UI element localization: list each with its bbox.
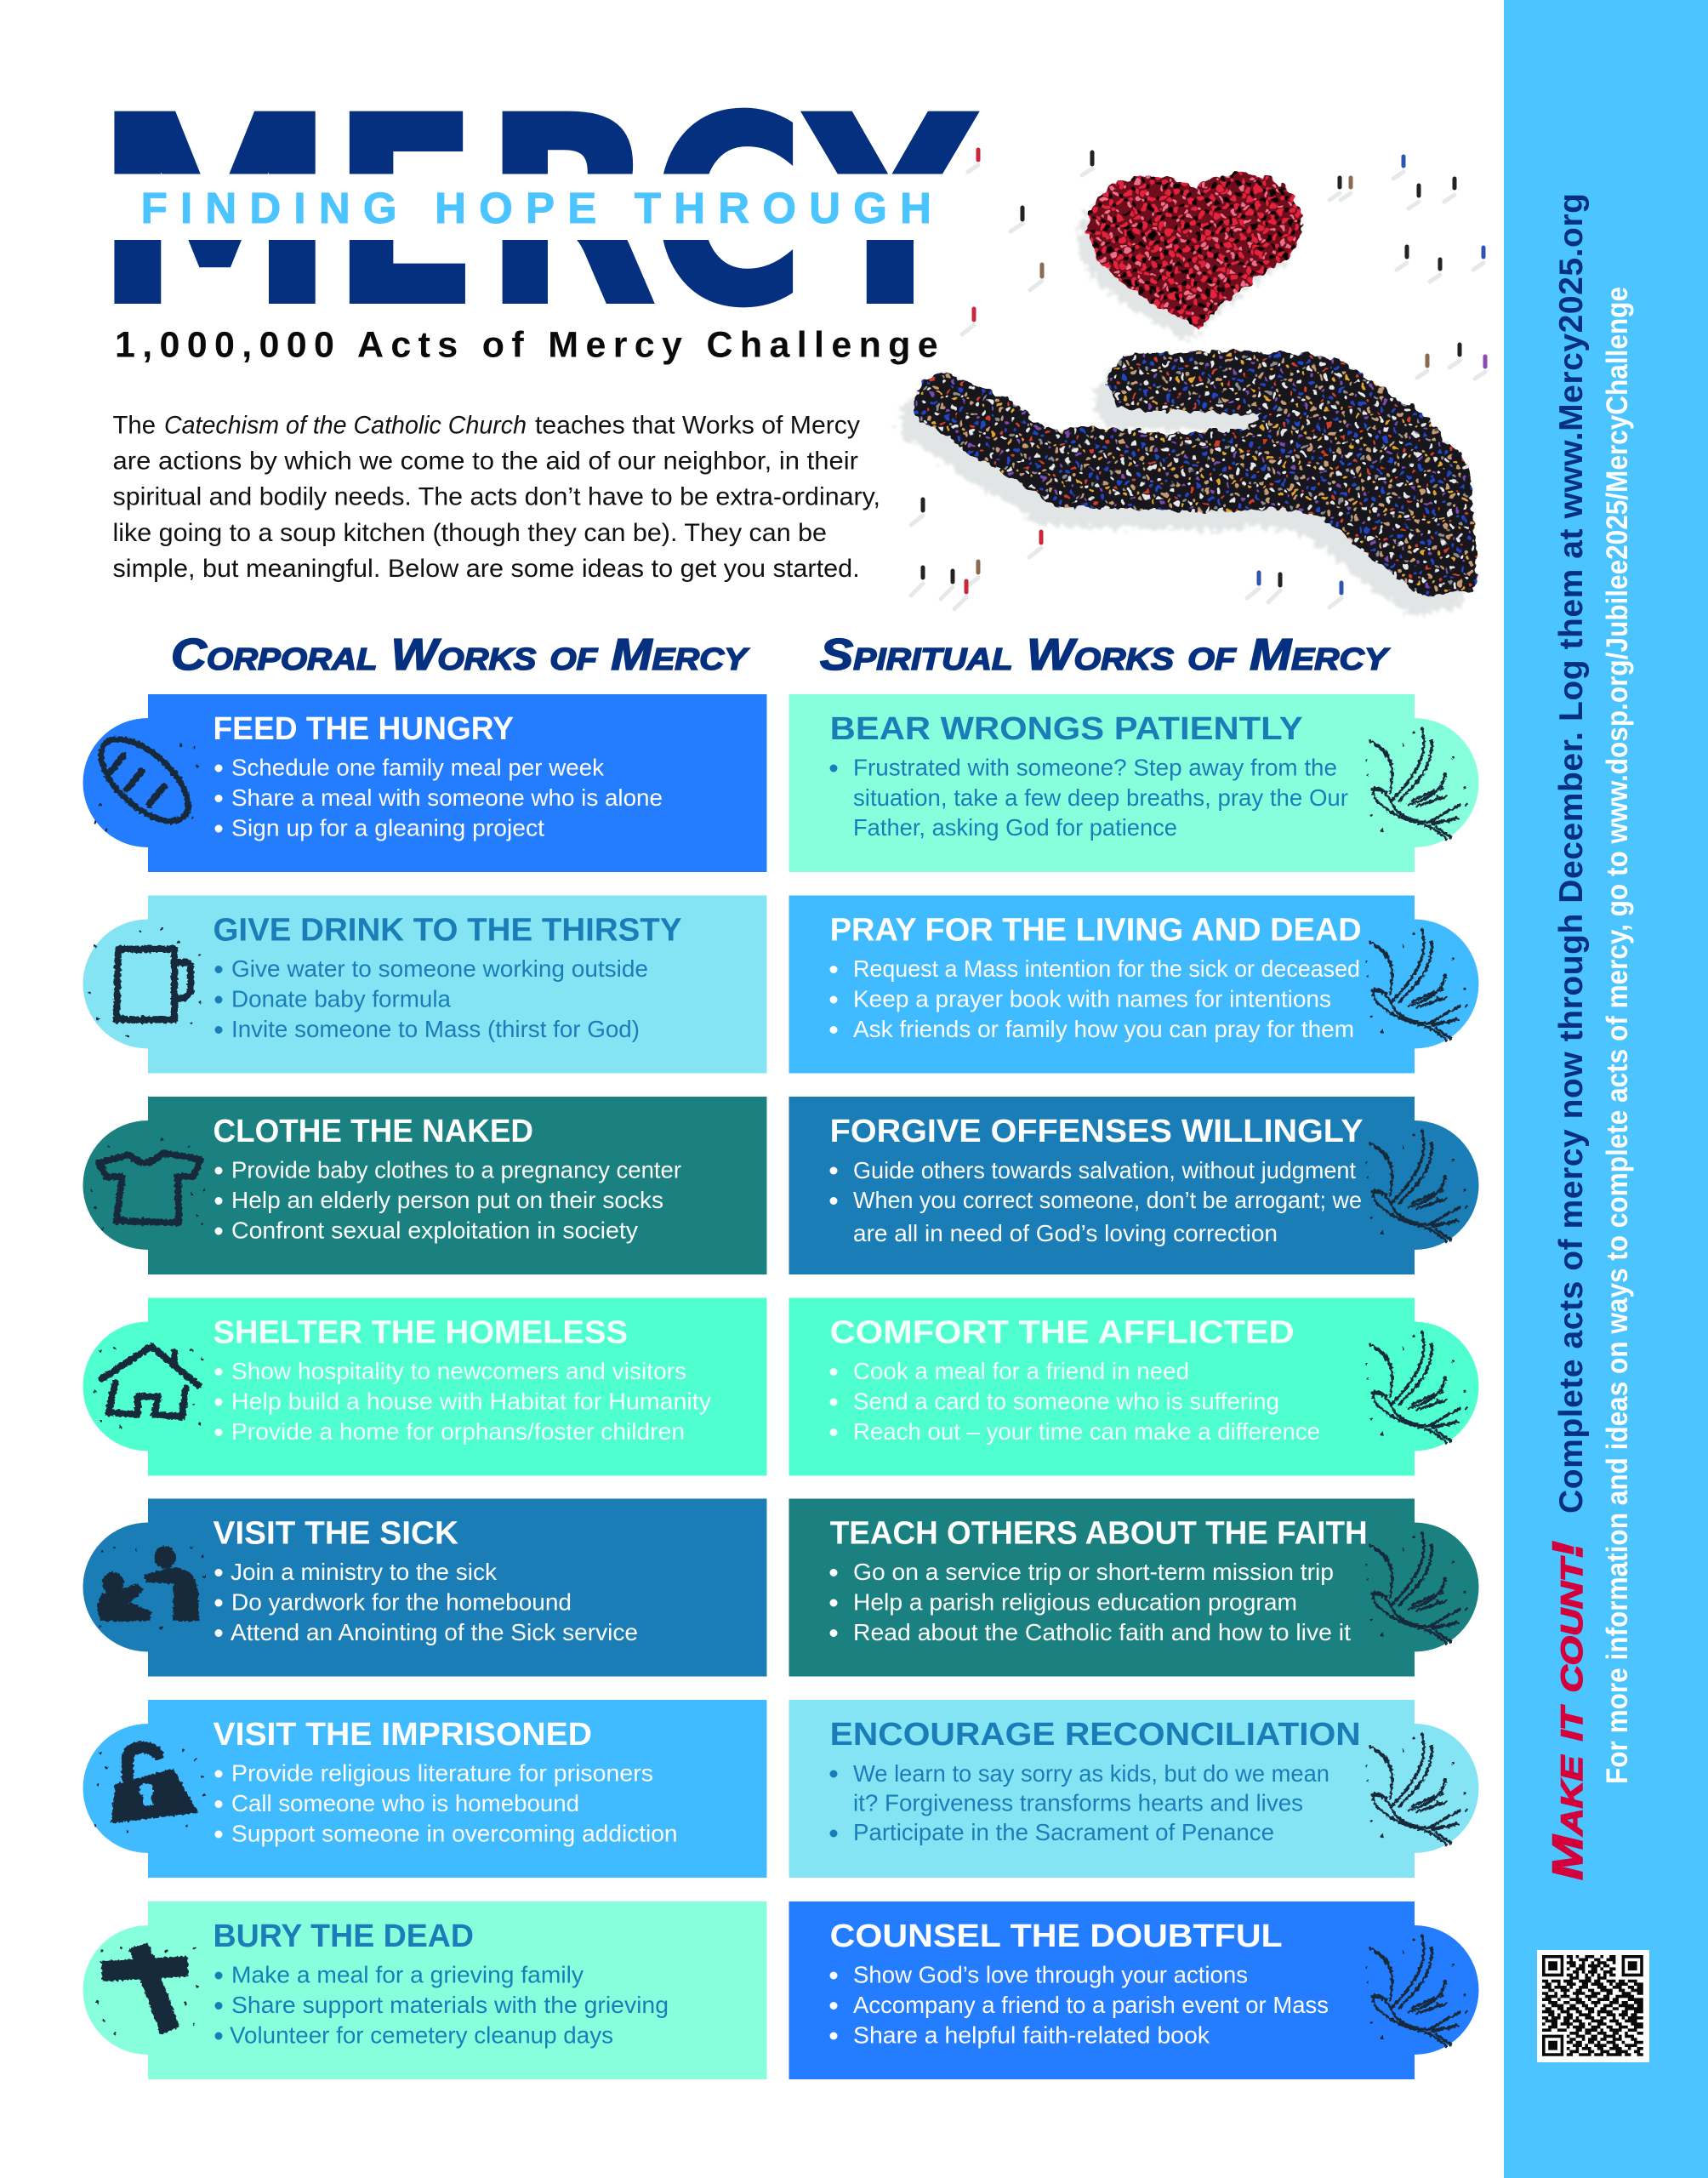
panel: feed the hungry [83,694,767,872]
icon: dove [1366,728,1466,839]
bullets [830,1760,1329,1845]
bullets [214,1962,669,2049]
bullets: Accompany a friend to a parish event or Mass [853,1992,1329,2018]
icon: helper and sick person [97,1547,204,1628]
intro text block: spiritual and bodily needs. The acts don’t have to be extra-ordinary, [112,483,880,511]
card title: BURY THE DEAD [213,1919,474,1954]
panel: visit the sick [83,1499,767,1676]
bullets: Volunteer for cemetery cleanup days [230,2021,613,2049]
bullets: it? Forgiveness transforms hearts and lives [853,1790,1303,1816]
icon: shirt [92,1139,204,1229]
bullets: Invite someone to Mass (thirst for God) [231,1016,640,1042]
bullets: Help a parish religious education program [853,1589,1297,1615]
card background [83,1700,767,1878]
scattered people [911,150,1485,609]
bullets: Support someone in overcoming addiction [231,1821,677,1846]
icon: mug [89,929,200,1036]
bullets: Cook a meal for a friend in need [853,1358,1189,1384]
icon: open lock [95,1748,204,1832]
bullets: Request a Mass intention for the sick or deceased [853,955,1360,982]
bullets: When you correct someone, don’t be arrogant; we [853,1187,1362,1213]
bullets: Help build a house with Habitat for Humanity [231,1388,711,1414]
icon: dove [1366,929,1466,1040]
card background [83,1298,767,1475]
bullets: Confront sexual exploitation in society [231,1217,638,1244]
card title: FEED THE HUNGRY [213,711,514,747]
bullets: Reach out – your time can make a difference [853,1418,1320,1445]
card title: TEACH OTHERS ABOUT THE FAITH [830,1516,1368,1552]
intro text block: simple, but meaningful. Below are some ideas to get you started. [112,555,860,583]
card background [83,1901,767,2079]
title: MERCY cut letters: Y [802,62,977,364]
bullets: Read about the Catholic faith and how to live it [853,1619,1351,1645]
bullets: Give water to someone working outside [231,955,648,982]
bullets: Send a card to someone who is suffering [853,1388,1279,1414]
bullets: Participate in the Sacrament of Penance [853,1819,1274,1845]
heading: acts of mercy challenge: 1,000,000 Acts of Mercy Challenge [115,325,938,366]
bullets: Keep a prayer book with names for intentions [853,985,1331,1012]
card title: VISIT THE SICK [213,1516,459,1552]
card background [789,1499,1478,1676]
icon: dove [1366,1734,1466,1844]
bullets: Provide a home for orphans/foster children [231,1418,685,1445]
QR code [1537,1950,1649,2062]
bullets: Donate baby formula [231,985,451,1012]
sidebar panel [1504,0,1708,2178]
panel: forgive offenses willingly [789,1097,1478,1274]
bullets: Share a helpful faith-related book [853,2021,1210,2049]
bullets: Make a meal for a grieving family [231,1962,584,1987]
panel: bury the dead [83,1901,767,2079]
intro text block: like going to a soup kitchen (though they can be). They can be [112,519,827,547]
heart of people [1088,174,1303,330]
sidebar background [1504,0,1708,2178]
panel: counsel the doubtful [789,1901,1478,2079]
bullets: Guide others towards salvation, without judgment [853,1157,1356,1183]
card title: PRAY FOR THE LIVING AND DEAD [830,912,1362,948]
bullets [830,754,1348,841]
card background [789,895,1478,1074]
bullets: Go on a service trip or short-term mission trip [853,1559,1334,1585]
intro text block: Catechism of the Catholic Church [164,412,527,439]
panel: encourage reconciliation [789,1700,1478,1878]
card title: VISIT THE IMPRISONED [213,1717,592,1753]
sidebar more information line: For more information and ideas on ways to complete acts of mercy, go to www.dosp.org/Jubilee2025/MercyChallenge [1601,287,1634,1784]
bullets: Help an elderly person put on their socks [231,1187,663,1213]
bullets: We learn to say sorry as kids, but do we mean [853,1760,1329,1787]
bullets: Ask friends or family how you can pray for them [853,1016,1354,1042]
bullets: Sign up for a gleaning project [231,815,544,841]
illustration: crowd forming heart above hand [899,150,1485,615]
bullets: Join a ministry to the sick [231,1559,498,1585]
card title: GIVE DRINK TO THE THIRSTY [213,912,682,948]
intro text block: teaches that Works of Mercy [535,412,860,439]
bullets: Provide religious literature for prisoners [231,1759,653,1787]
card background [83,694,767,872]
panel: shelter the homeless [83,1298,767,1475]
bullets [214,1559,638,1645]
card title: ENCOURAGE RECONCILIATION [830,1717,1361,1753]
title: MERCY cut letters: E [331,62,480,364]
bullets [830,1962,1329,2049]
card background [789,1298,1478,1475]
card background [789,1700,1478,1878]
card title: COMFORT THE AFFLICTED [830,1315,1295,1351]
bullets: Call someone who is homebound [231,1790,579,1816]
card title: SHELTER THE HOMELESS [213,1315,628,1351]
card background [789,1097,1478,1274]
bullets [214,1157,681,1244]
panel: comfort the afflicted [789,1298,1478,1475]
bullets [214,1759,677,1846]
bullets: Attend an Anointing of the Sick service [231,1619,638,1645]
intro text block: are actions by which we come to the aid of our neighbor, in their [112,448,858,476]
sidebar challenge line: Complete acts of mercy now through December. Log them at www.Mercy2025.org [1553,193,1590,1514]
icon: dove [1366,1533,1466,1644]
card background [83,1499,767,1676]
bullets [830,1358,1320,1445]
bullets [830,955,1360,1042]
bullets: Frustrated with someone? Step away from the [853,754,1337,781]
card title: COUNSEL THE DOUBTFUL [830,1919,1283,1954]
crowd shadows [899,185,1464,615]
icon: dove [1366,1936,1466,2046]
card title: FORGIVE OFFENSES WILLINGLY [830,1114,1364,1149]
bullets: are all in need of God’s loving correction [853,1220,1278,1246]
icon: bread [87,725,202,835]
heading: corporal works: Corporal Works of Mercy [171,630,749,680]
panel: give drink to the thirsty [83,895,767,1074]
title: MERCY cut letters: R [483,62,657,364]
bullets: Do yardwork for the homebound [231,1589,572,1615]
make it count callout: Make it count! [1544,1541,1591,1880]
bullets [830,1559,1351,1645]
title: MERCY cut letters [114,107,980,308]
bullets: Schedule one family meal per week [231,754,605,781]
bullets [214,1358,711,1445]
bullets [214,955,648,1042]
bullets: Show God’s love through your actions [853,1962,1248,1987]
title: MERCY cut letters: C [651,62,805,364]
card background [789,694,1478,872]
icon: house [95,1346,202,1428]
heading: spiritual works: Spiritual Works of Mercy [820,630,1390,680]
panel: pray for the living and dead [789,895,1478,1074]
intro text block: The [112,412,156,439]
card background [789,1901,1478,2079]
bullets [830,1157,1362,1246]
hand of people [913,351,1477,596]
panel: teach others about the faith [789,1499,1478,1676]
card background [83,1097,767,1274]
bullets: Show hospitality to newcomers and visitors [231,1358,686,1384]
title: MERCY cut letters: M [94,61,336,363]
bullets: Share a meal with someone who is alone [231,784,663,811]
bullets: Father, asking God for patience [853,814,1177,841]
subtitle: finding hope through: FINDING HOPE THROUGH [141,184,931,232]
bullets: situation, take a few deep breaths, pray the Our [853,784,1348,811]
icon: dove [1366,1332,1466,1443]
panel: visit the imprisoned [83,1700,767,1878]
icon: dove [1366,1131,1466,1241]
bullets: Share support materials with the grieving [231,1992,669,2018]
card background [83,895,767,1074]
bullets: Provide baby clothes to a pregnancy center [231,1157,681,1183]
icon: cross [98,1946,197,2033]
panel: bear wrongs patiently [789,694,1478,872]
card title: CLOTHE THE NAKED [213,1114,533,1149]
panel: clothe the naked [83,1097,767,1274]
bullets [214,754,663,841]
intro text block [112,412,880,583]
card title: BEAR WRONGS PATIENTLY [830,711,1303,747]
